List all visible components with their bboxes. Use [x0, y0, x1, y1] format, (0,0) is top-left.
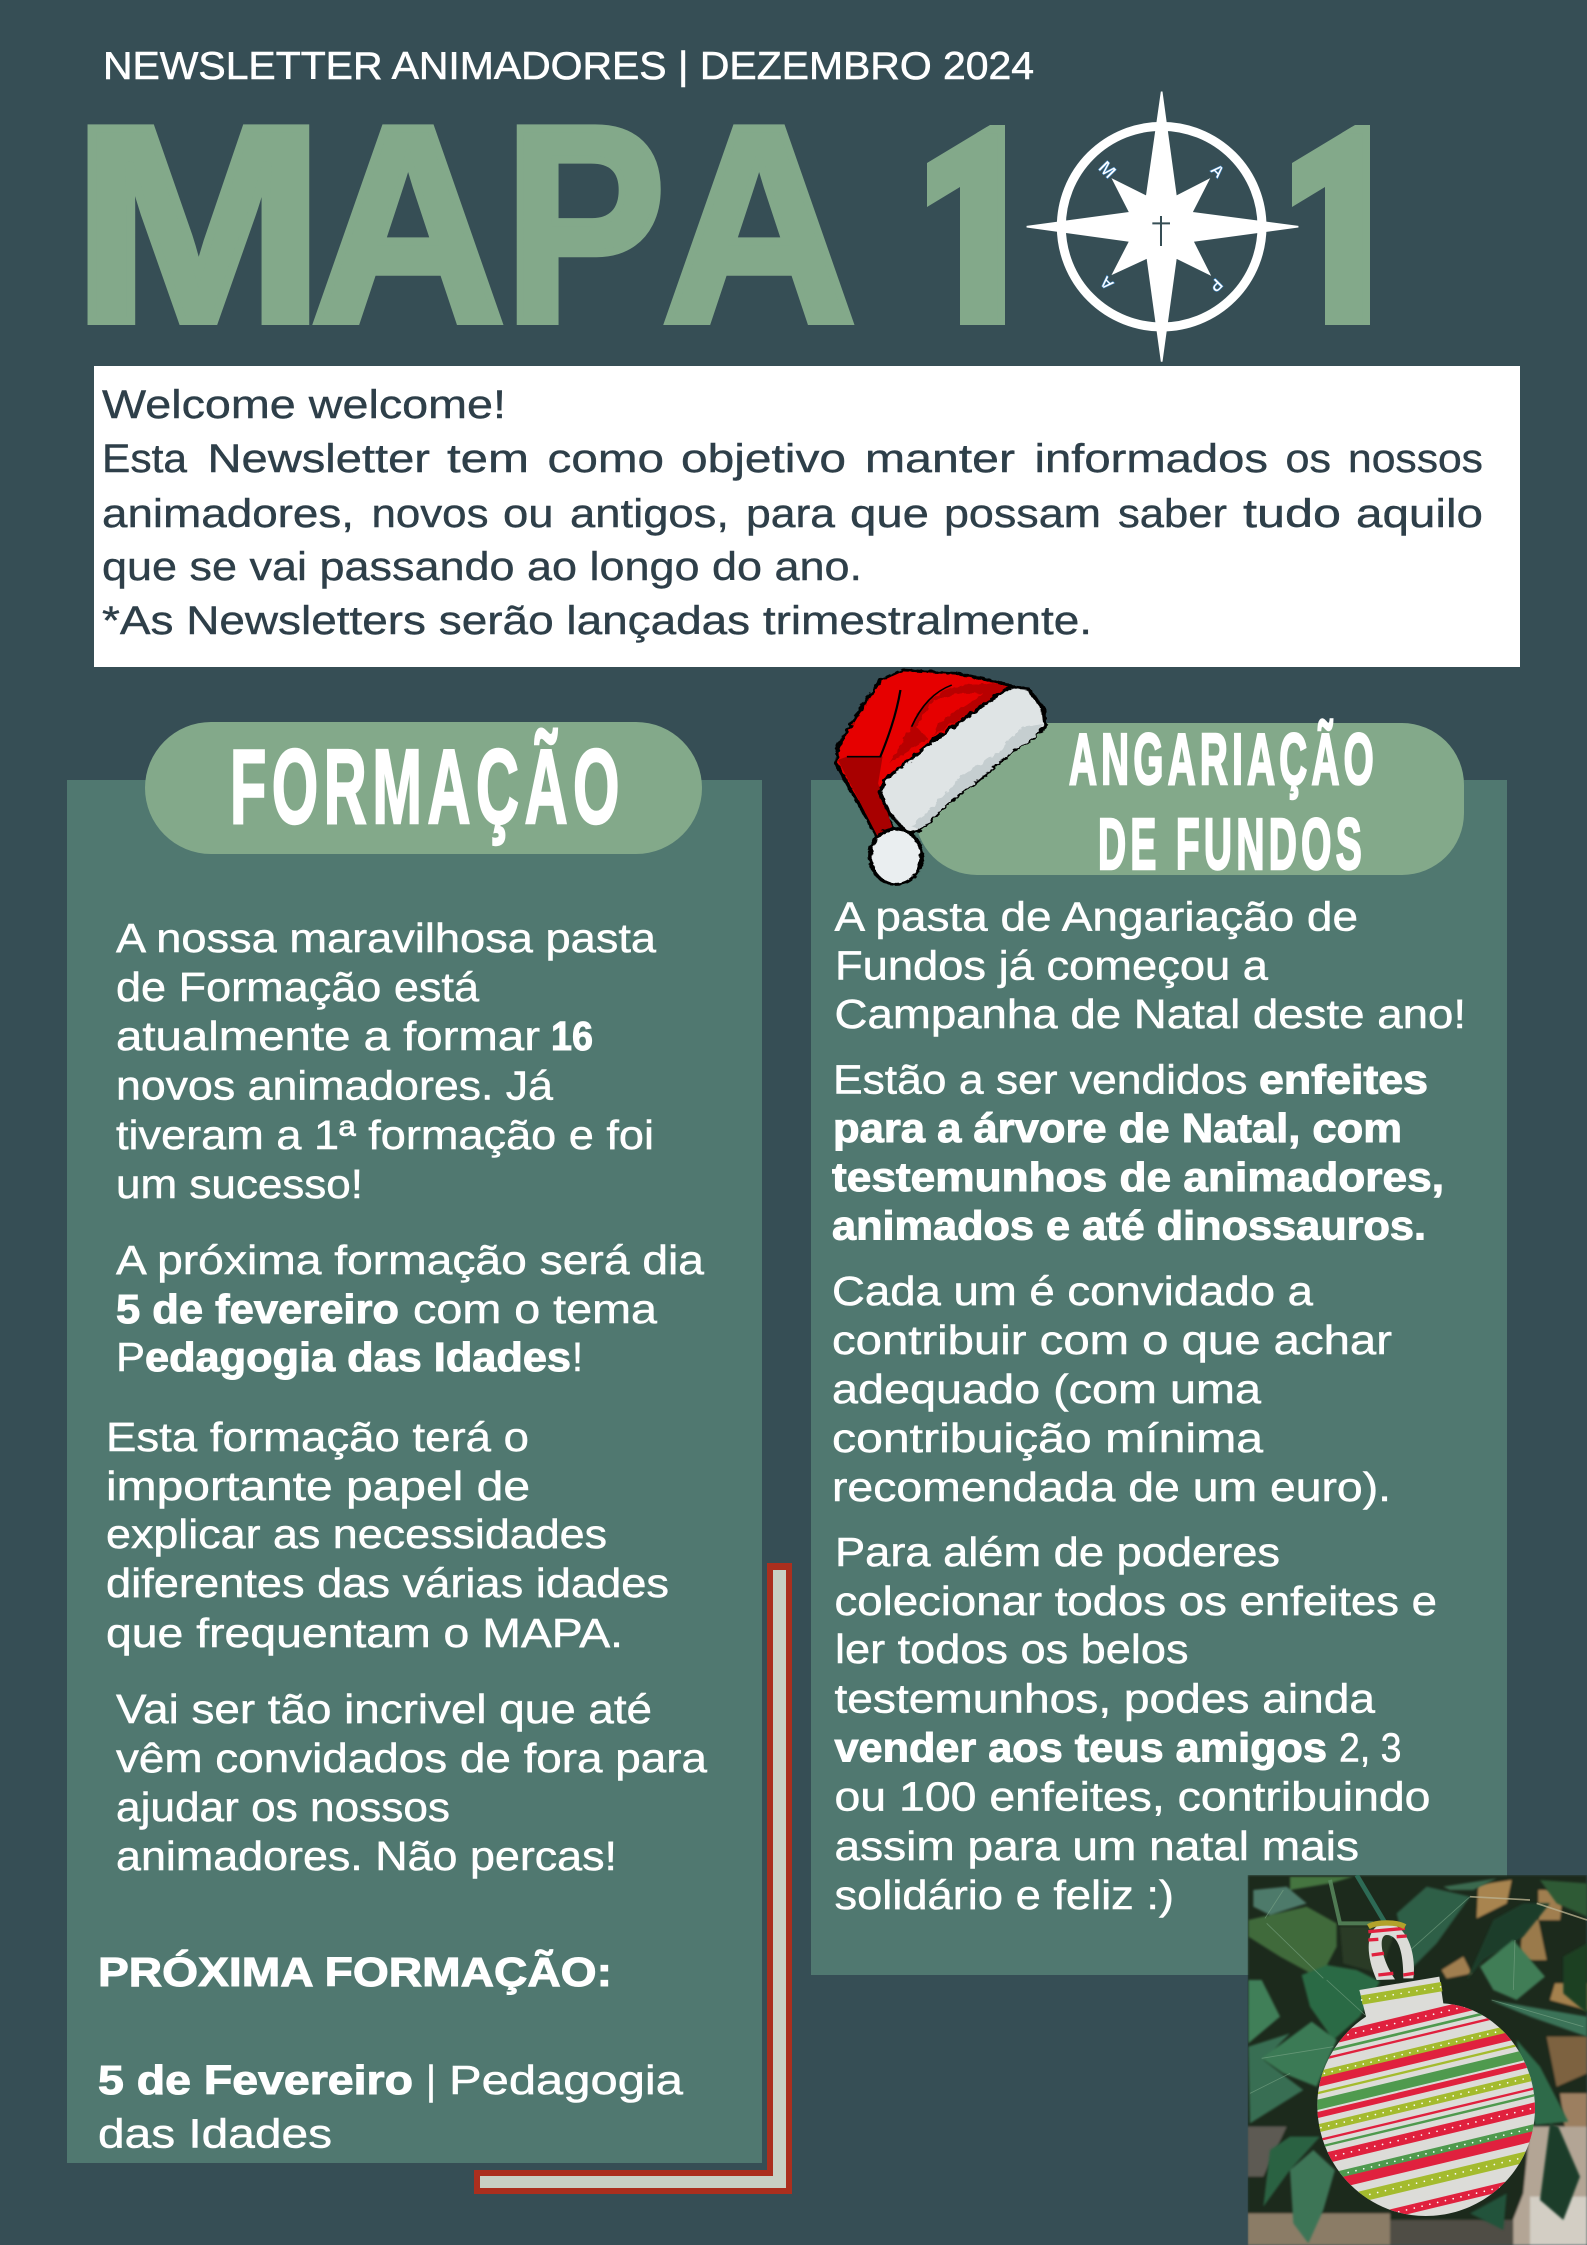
paragraph: formação 2: edagogia das Idades [145, 1334, 571, 1380]
title: MAPA 101: M [72, 67, 325, 380]
welcome text line 3: saber [1118, 492, 1227, 536]
paragraph: formação 4: vêm convidados de fora para [116, 1735, 707, 1781]
welcome text line 3: novos [372, 492, 488, 536]
panel: formação [67, 722, 762, 2163]
angariação heading pill: DE FUNDOS [1098, 805, 1366, 885]
angariação heading pill [915, 719, 1464, 885]
paragraph: formação 1: 16 [551, 1013, 593, 1059]
paragraph: formação 3 [106, 1414, 669, 1656]
paragraph: formação 1: de Formação está [116, 964, 479, 1010]
paragraph: formação 2 [116, 1237, 704, 1380]
welcome text line 5: *As Newsletters serão lançadas trimestralmente. [102, 599, 1092, 643]
formação heading pill: FORMAÇÃO [230, 728, 625, 846]
paragraph: formação 2: 5 de fevereiro [116, 1286, 399, 1332]
paragraph: formação 2: ! [572, 1334, 583, 1380]
title: MAPA 101: A [662, 69, 856, 381]
paragraph: formação 4: Vai ser tão incrivel que até [116, 1686, 652, 1732]
paragraph: angariação 1: Campanha de Natal deste ano! [834, 991, 1466, 1037]
paragraph: angariação 4 [834, 1529, 1437, 1918]
paragraph: angariação 3: recomendada de um euro). [832, 1464, 1391, 1510]
paragraph: formação 4 [116, 1686, 707, 1879]
welcome text line 2: como [548, 437, 664, 481]
paragraph: formação 1: tiveram a 1ª formação e foi [116, 1112, 654, 1158]
callout: próxima formação [98, 1949, 683, 2156]
paragraph: angariação 1: Fundos já começou a [835, 942, 1268, 988]
paragraph: formação 1 [116, 915, 656, 1207]
paragraph: angariação 3 [832, 1268, 1392, 1510]
paragraph: angariação 2: animados e até dinossauros. [832, 1202, 1426, 1248]
photo: ornament on poinsettia [1247, 1875, 1587, 2245]
formação heading pill [145, 722, 702, 854]
paragraph: angariação 4: testemunhos, podes ainda [834, 1676, 1375, 1722]
welcome text line 2: nossos [1348, 437, 1483, 481]
welcome text line 4: que se vai passando ao longo do ano. [102, 545, 862, 589]
welcome text line 3: animadores, [102, 492, 354, 536]
icon: compass: M [1095, 157, 1120, 182]
paragraph: formação 4: animadores. Não percas! [116, 1833, 617, 1879]
paragraph: formação 1: A nossa maravilhosa pasta [116, 915, 656, 961]
welcome text line 3: para [746, 492, 836, 536]
paragraph: formação 1: atualmente a formar [116, 1013, 540, 1059]
paragraph: angariação 2: Estão a ser vendidos [833, 1056, 1248, 1102]
welcome text line 2 [102, 437, 1483, 481]
paragraph: angariação 2: enfeites [1259, 1056, 1428, 1102]
paragraph: angariação 1: A pasta de Angariação de [834, 894, 1358, 940]
icon: compass: A [1207, 160, 1228, 182]
paragraph: formação 3: importante papel de [106, 1463, 530, 1509]
welcome text line 1: Welcome welcome! [102, 383, 506, 427]
paragraph: formação 3: Esta formação terá o [106, 1414, 529, 1460]
welcome text line 2: os [1286, 437, 1331, 481]
title: MAPA 101: A [311, 69, 505, 381]
welcome text line 3: ou [503, 492, 554, 536]
panel: welcome box [94, 366, 1520, 667]
paragraph: formação 4: ajudar os nossos [116, 1784, 450, 1830]
paragraph: formação 3: que frequentam o MAPA. [106, 1610, 623, 1656]
title: MAPA 101: 1 [1104, 30, 1508, 531]
welcome text line 3 [102, 492, 1483, 536]
welcome text line 2: manter [865, 437, 1015, 481]
welcome text line 2: Esta [102, 437, 188, 481]
welcome text line 3: aquilo [1356, 492, 1483, 536]
paragraph: formação 2: P [116, 1334, 145, 1380]
paragraph: formação 2: A próxima formação será dia [116, 1237, 704, 1283]
callout: próxima formação: | [426, 2057, 436, 2103]
paragraph: formação 3: diferentes das várias idades [106, 1560, 669, 1606]
heading: newsletter line: NEWSLETTER ANIMADORES | DEZEMBRO 2024 [103, 45, 1034, 88]
paragraph: angariação 2: para a árvore de Natal, com [833, 1105, 1402, 1151]
welcome text line 3: antigos, [570, 492, 729, 536]
callout: próxima formação: Pedagogia [449, 2057, 683, 2103]
paragraph: angariação 4: Para além de poderes [835, 1529, 1280, 1575]
decorative L-shaped frame [474, 1563, 792, 2194]
paragraph: angariação 3: contribuir com o que achar [832, 1317, 1392, 1363]
paragraph: formação 2: com o tema [413, 1286, 657, 1332]
paragraph: angariação 1 [834, 894, 1466, 1037]
poinsettia leaves [1248, 1877, 1587, 2243]
paragraph: formação 1: novos animadores. Já [116, 1062, 553, 1108]
panel: angariação de fundos [811, 719, 1507, 1975]
callout: próxima formação: 5 de Fevereiro [98, 2057, 413, 2103]
paragraph: angariação 3: contribuição mínima [832, 1415, 1263, 1461]
welcome text line 3: tudo [1243, 492, 1341, 536]
paragraph: formação 1: um sucesso! [116, 1161, 363, 1207]
callout: próxima formação: PRÓXIMA FORMAÇÃO: [98, 1949, 612, 1995]
paragraph: formação 3: explicar as necessidades [106, 1511, 607, 1557]
paragraph: angariação 4: colecionar todos os enfeites e [834, 1578, 1437, 1624]
icon: compass [1027, 92, 1298, 362]
ornament [1317, 1920, 1535, 2216]
callout: próxima formação: das Idades [98, 2110, 332, 2156]
paragraph: angariação 3: Cada um é convidado a [832, 1268, 1313, 1314]
photo background [1248, 1875, 1587, 2245]
icon: compass: A [1096, 272, 1118, 294]
paragraph: angariação 4: ler todos os belos [835, 1626, 1188, 1672]
paragraph: angariação 2 [832, 1056, 1444, 1248]
welcome text line 2: objetivo [681, 437, 846, 481]
title: MAPA 101: P [504, 69, 666, 381]
title: MAPA 101 [72, 30, 1508, 531]
icon: santa hat [836, 670, 1046, 884]
welcome text line 3: possam [944, 492, 1101, 536]
welcome text line 3: que [850, 492, 929, 536]
welcome text line 2: tem [447, 437, 529, 481]
paragraph: angariação 4: assim para um natal mais [834, 1823, 1359, 1869]
welcome text line 2: Newsletter [208, 437, 430, 481]
paragraph: angariação 4: ou 100 enfeites, contribuindo [834, 1774, 1430, 1820]
icon: compass: P [1205, 275, 1227, 296]
paragraph: angariação 2: testemunhos de animadores, [832, 1154, 1444, 1200]
paragraph: angariação 3: adequado (com uma [832, 1366, 1261, 1412]
paragraph: angariação 4: vender aos teus amigos [834, 1725, 1327, 1771]
title: MAPA 101: 1 [738, 30, 1143, 531]
leaf stems and veins [1250, 1875, 1587, 2093]
welcome text line 2: informados [1034, 437, 1268, 481]
paragraph: angariação 4: 2, 3 [1339, 1725, 1402, 1771]
paragraph: angariação 4: solidário e feliz :) [834, 1872, 1174, 1918]
